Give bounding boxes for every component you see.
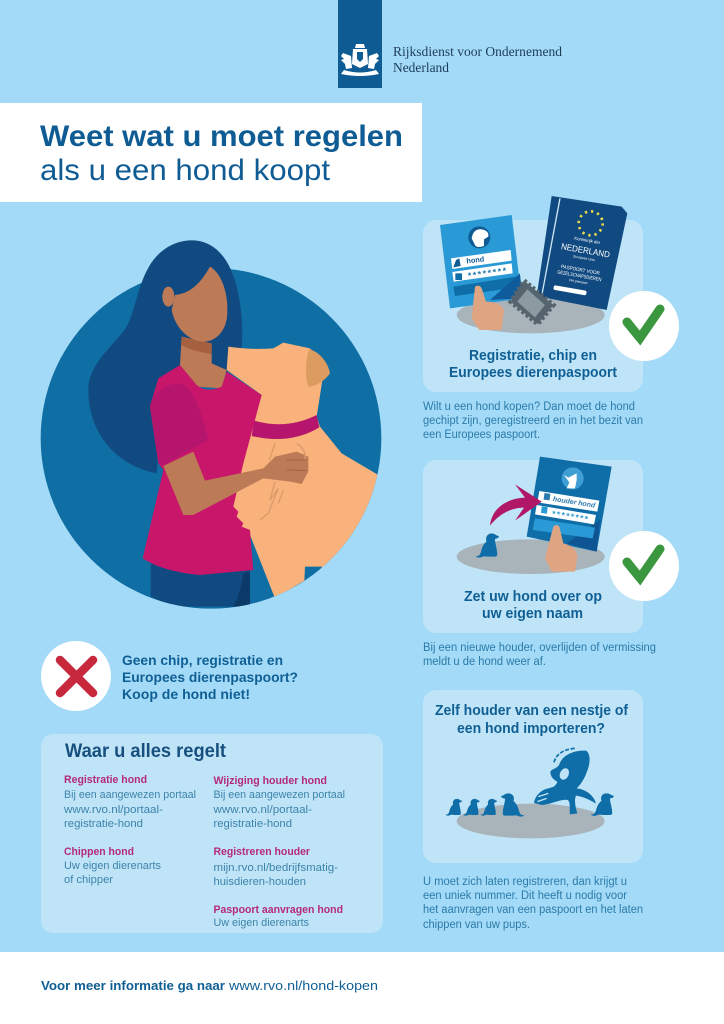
left column: Uw eigen dierenarts xyxy=(64,860,161,872)
text: overzetten toelichting: Bij een nieuwe houder, overlijden of vermissing xyxy=(423,642,656,654)
text: nestje toelichting: U moet zich laten registreren, dan krijgt u xyxy=(423,876,627,888)
illustration: form, chip and passport: GEZELSCHAPSDIEREN xyxy=(557,270,602,283)
illustration: form with arrow and dog: houder hond xyxy=(552,496,596,510)
callout: koop de hond niet: Europees dierenpaspoort? xyxy=(122,669,298,685)
illustration: form, chip and passport xyxy=(440,196,627,333)
right column: Uw eigen dierenarts xyxy=(214,917,309,929)
callout: koop de hond niet: Geen chip, registratie en xyxy=(122,652,283,668)
panel: waar u alles regelt xyxy=(41,734,383,933)
logo text: Rijksdienst voor Ondernemend xyxy=(393,45,562,60)
right column: Wijziging houder hond xyxy=(214,775,327,787)
text: nestje toelichting: het aanvragen van een paspoort en het laten xyxy=(423,904,643,916)
illustration: form, chip and passport: Koninkrijk der xyxy=(574,236,601,245)
text: nestje toelichting xyxy=(423,876,643,931)
right column: Bij een aangewezen portaal xyxy=(214,789,345,801)
footer xyxy=(0,952,724,1024)
text: nestje toelichting: een uniek nummer. Dit heeft u nodig voor xyxy=(423,890,627,902)
text: overzetten toelichting: meldt u de hond weer af. xyxy=(423,656,546,668)
icon: check mark 2 xyxy=(609,531,679,601)
left column: Chippen hond xyxy=(64,846,134,858)
panel: waar u alles regelt: Waar u alles regelt xyxy=(65,741,227,762)
panel: hond overzetten xyxy=(423,457,643,633)
left column: Bij een aangewezen portaal xyxy=(64,789,196,801)
title block xyxy=(0,103,422,202)
text: overzetten toelichting xyxy=(423,642,656,668)
logo: Rijksoverheid crest xyxy=(338,0,382,88)
illustration: form with arrow and dog: ******** xyxy=(551,508,590,524)
title block: als u een hond koopt xyxy=(40,154,331,187)
illustration: form, chip and passport: ******** xyxy=(467,265,509,281)
left column: Registratie hond xyxy=(64,774,147,786)
panel: nestje of import: een hond importeren? xyxy=(457,721,605,737)
footer: www.rvo.nl/hond-kopen xyxy=(228,978,378,993)
callout: koop de hond niet: Koop de hond niet! xyxy=(122,686,250,702)
right column: Registreren houder xyxy=(214,846,311,858)
text: registratie toelichting xyxy=(423,401,643,441)
left column xyxy=(63,774,196,886)
right column: Paspoort aanvragen hond xyxy=(214,904,343,916)
illustration: form, chip and passport: Pet passport xyxy=(569,278,588,285)
panel: hond overzetten: uw eigen naam xyxy=(482,606,583,622)
left column: registratie-hond xyxy=(64,818,143,830)
right column xyxy=(212,775,345,929)
illustration: form, chip and passport: PASPOORT VOOR xyxy=(560,264,601,277)
illustration: dogs and map of the Netherlands xyxy=(446,748,614,838)
text: registratie toelichting: gechipt zijn, geregistreerd en in het bezit van xyxy=(423,415,643,427)
icon: red cross xyxy=(41,641,111,711)
panel: registratie, chip en paspoort: Registratie, chip en xyxy=(469,348,597,364)
text: registratie toelichting: Wilt u een hond kopen? Dan moet de hond xyxy=(423,401,635,413)
panel: registratie, chip en paspoort xyxy=(423,196,643,392)
text: nestje toelichting: chippen van uw pups. xyxy=(423,919,530,931)
text: registratie toelichting: een Europees paspoort. xyxy=(423,429,540,441)
panel: registratie, chip en paspoort: Europees dierenpaspoort xyxy=(449,365,617,381)
right column: mijn.rvo.nl/bedrijfsmatig- xyxy=(214,862,338,874)
left column: of chipper xyxy=(64,874,113,886)
illustration: form, chip and passport: Europese Unie xyxy=(573,254,595,262)
illustration: woman hugging dog xyxy=(41,240,397,609)
panel: hond overzetten: Zet uw hond over op xyxy=(464,589,602,605)
left column: www.rvo.nl/portaal- xyxy=(63,804,163,816)
icon: check mark 1 xyxy=(609,291,679,361)
panel: nestje of import: Zelf houder van een nestje of xyxy=(435,703,628,719)
right column: huisdieren-houden xyxy=(214,876,306,888)
logo text: Nederland xyxy=(393,61,449,76)
panel: nestje of import xyxy=(423,690,643,863)
illustration: form, chip and passport: NEDERLAND xyxy=(560,241,611,260)
illustration: form with arrow and dog xyxy=(457,457,612,574)
illustration: form, chip and passport: hond xyxy=(466,254,485,265)
callout: koop de hond niet xyxy=(122,652,298,702)
footer: Voor meer informatie ga naar xyxy=(41,978,225,993)
logo text xyxy=(393,45,562,76)
right column: www.rvo.nl/portaal- xyxy=(212,804,312,816)
title block: Weet wat u moet regelen xyxy=(40,120,403,153)
right column: registratie-hond xyxy=(214,818,292,830)
